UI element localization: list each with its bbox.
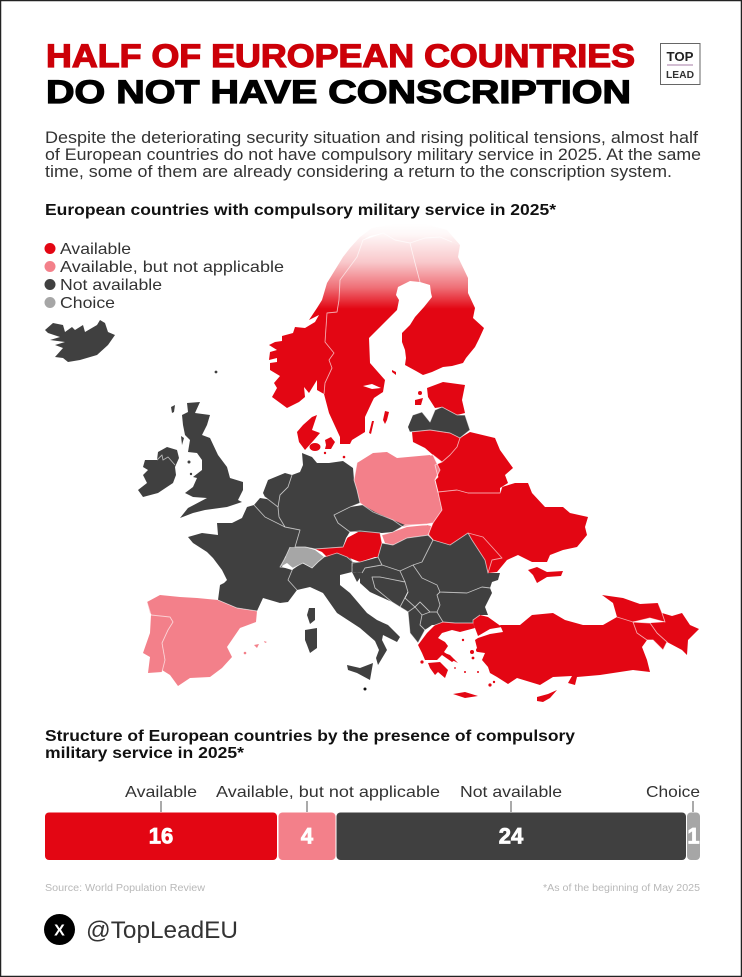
Kosovo <box>415 602 430 615</box>
Latvia <box>408 407 470 438</box>
segment: not available 24 <box>336 812 686 860</box>
segment: choice 1: 1 <box>687 824 700 848</box>
Corsica <box>307 608 315 624</box>
Sardinia <box>305 628 317 653</box>
logo: Top Lead: LEAD <box>666 69 694 81</box>
Slovakia <box>382 525 431 545</box>
intro paragraph: time, some of them are already considering a return to the conscription system. <box>45 162 672 181</box>
Iceland <box>45 320 115 362</box>
North Macedonia <box>420 612 443 630</box>
Albania <box>408 607 425 643</box>
segment: available but not applicable 4: 4 <box>301 824 314 848</box>
Croatia <box>352 565 405 602</box>
segment: available but not applicable 4 <box>278 812 336 860</box>
segment: available 16 <box>45 812 277 860</box>
Belarus <box>435 432 513 493</box>
Hungary <box>378 535 433 571</box>
Bosnia and Herzegovina <box>372 577 408 607</box>
Cyprus <box>537 690 557 702</box>
Turkey <box>473 613 650 685</box>
bar label: not available: Not available <box>460 784 562 801</box>
Malta <box>364 688 366 690</box>
Gotland and Oland <box>343 370 396 458</box>
X handle: @TopLeadEU <box>86 917 238 944</box>
intro paragraph: of European countries do not have compulsory military service in 2025. At the same <box>45 145 701 164</box>
Czechia <box>334 505 405 533</box>
Switzerland <box>280 547 324 568</box>
Austria <box>315 531 382 562</box>
legend <box>44 241 284 312</box>
segment: choice 1 <box>687 812 700 860</box>
United Kingdom <box>171 402 243 518</box>
bar label: choice <box>646 784 700 812</box>
title: HALF OF EUROPEAN COUNTRIES <box>46 38 635 74</box>
bar label: available but not applicable: Available, but not applicable <box>216 784 440 801</box>
Serbia <box>400 565 440 612</box>
Georgia <box>602 595 665 622</box>
stacked bar chart <box>45 784 700 860</box>
structure heading: military service in 2025* <box>45 745 245 762</box>
Sicily <box>347 663 373 680</box>
Italy <box>288 553 400 665</box>
logo: Top Lead: TOP <box>666 50 694 64</box>
Norway <box>269 224 460 408</box>
Denmark <box>297 415 335 454</box>
Spain <box>147 595 257 686</box>
X handle <box>44 914 238 945</box>
segment: available 16: 16 <box>149 824 173 848</box>
Ukraine <box>428 483 588 573</box>
structure heading: Structure of European countries by the presence of compulsory <box>45 728 575 745</box>
intro paragraph: Despite the deteriorating security situation and rising political tensions, almost half <box>45 128 698 147</box>
map heading: European countries with compulsory military service in 2025* <box>45 202 557 219</box>
Sweden <box>324 233 420 444</box>
Bulgaria <box>437 587 492 623</box>
icon: X logo <box>44 914 75 945</box>
bar label: not available <box>460 784 562 812</box>
logo: Top Lead <box>660 44 700 84</box>
France <box>188 505 300 611</box>
country borders <box>147 233 667 672</box>
Finland <box>402 237 484 375</box>
Belgium and Luxembourg <box>254 498 285 527</box>
Germany <box>278 453 360 549</box>
Portugal <box>143 615 173 673</box>
Azerbaijan <box>650 613 699 655</box>
segment: not available 24: 24 <box>499 824 524 848</box>
title: DO NOT HAVE CONSCRIPTION <box>46 74 631 110</box>
source note: Source: World Population Review <box>45 883 206 894</box>
Netherlands <box>263 473 292 507</box>
legend item: available: Available <box>60 241 131 258</box>
Greece <box>418 622 495 698</box>
Faroe Islands <box>215 371 217 373</box>
Armenia <box>633 622 667 650</box>
northern fade overlay <box>300 222 490 310</box>
bar label: available: Available <box>125 784 197 801</box>
intro paragraph <box>45 128 701 181</box>
Montenegro <box>400 598 415 612</box>
Romania <box>413 533 500 593</box>
Moldova <box>468 533 502 573</box>
icon: X logo: X <box>54 922 65 940</box>
bar label: choice: Choice <box>646 784 700 801</box>
lake and inlet <box>363 384 381 389</box>
legend item: available, but not applicable: Available, but not applicable <box>60 259 284 276</box>
Lithuania <box>412 430 460 462</box>
map of Europe <box>45 222 699 702</box>
Slovenia <box>352 557 382 573</box>
Crimea <box>528 567 563 583</box>
title <box>46 38 635 110</box>
footnote: *As of the beginning of May 2025 <box>543 883 700 894</box>
Poland <box>354 452 442 527</box>
structure heading <box>45 728 575 762</box>
Ireland <box>138 447 179 497</box>
Balearic Islands <box>244 641 267 654</box>
legend item: choice: Choice <box>60 295 115 312</box>
legend item: not available: Not available <box>60 277 162 294</box>
Estonia <box>415 382 465 415</box>
bar label: available <box>125 784 197 812</box>
